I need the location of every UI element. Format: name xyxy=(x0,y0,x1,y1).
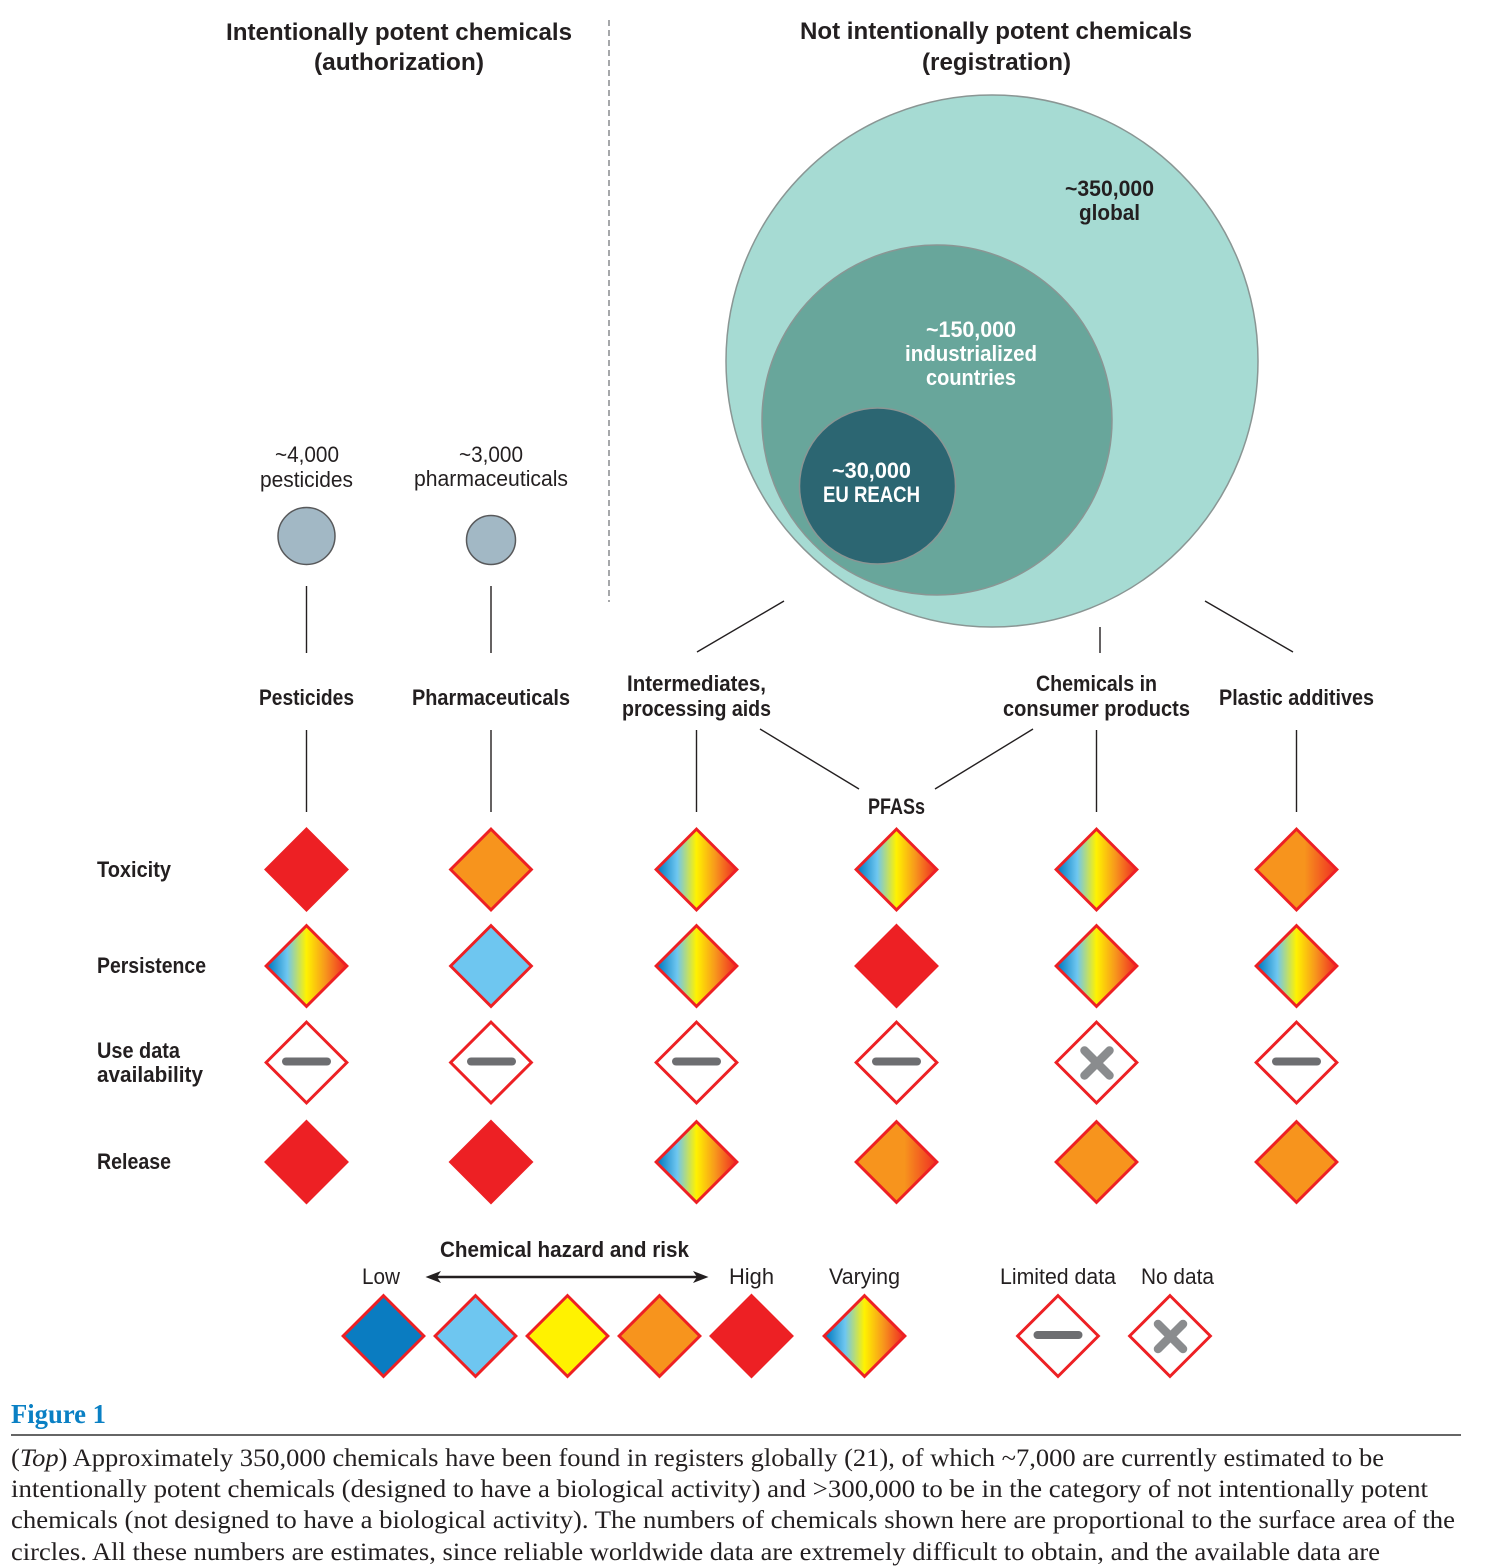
legend labels: Limited data xyxy=(1000,1264,1117,1289)
circle: industrialized countries xyxy=(762,245,1112,595)
row: persistence diamonds xyxy=(266,926,1337,1006)
category labels: consumer products xyxy=(1003,696,1190,721)
legend xyxy=(343,1237,1215,1376)
nested circles: registered chemicals xyxy=(726,95,1258,627)
row labels: availability xyxy=(97,1062,204,1087)
circle: global xyxy=(726,95,1258,627)
pharmaceuticals count and circle: ~3,000 xyxy=(459,442,523,467)
row labels: Release xyxy=(97,1149,171,1174)
row: release diamonds xyxy=(266,1122,1337,1202)
legend title: Chemical hazard and risk xyxy=(440,1237,690,1262)
legend labels: No data xyxy=(1141,1264,1215,1289)
connector lines xyxy=(306,586,1296,812)
pharmaceuticals count and circle xyxy=(414,442,568,564)
category labels: processing aids xyxy=(622,696,771,721)
pesticides count and circle xyxy=(260,442,353,564)
heading: not intentionally potent chemicals: Not intentionally potent chemicals xyxy=(800,18,1192,45)
legend arrow xyxy=(426,1271,708,1283)
row labels xyxy=(97,857,206,1174)
category labels: PFASs xyxy=(868,794,925,819)
label: industrialized countries: ~150,000 xyxy=(926,317,1016,342)
legend labels: Low xyxy=(362,1264,400,1289)
label: industrialized countries: countries xyxy=(926,365,1016,390)
heading: intentionally potent chemicals: (authorization) xyxy=(314,49,484,76)
legend labels: Varying xyxy=(829,1264,900,1289)
category labels: Intermediates, xyxy=(627,671,766,696)
category labels: Chemicals in xyxy=(1036,671,1157,696)
heading: intentionally potent chemicals: Intentionally potent chemicals xyxy=(226,19,572,46)
label: EU REACH xyxy=(823,458,920,507)
legend labels xyxy=(362,1264,1215,1289)
legend labels: High xyxy=(729,1264,774,1289)
caption xyxy=(11,1445,1455,1566)
row: toxicity diamonds xyxy=(266,829,1337,910)
category labels xyxy=(259,671,1374,819)
label: EU REACH: EU REACH xyxy=(823,482,920,507)
label: global xyxy=(1065,176,1154,225)
circle: EU REACH xyxy=(800,408,956,564)
pharmaceuticals count and circle: pharmaceuticals xyxy=(414,466,568,491)
pesticides count and circle: ~4,000 xyxy=(275,442,339,467)
caption: intentionally potent chemicals (designed to have a biological activity) and >300,000 to be in the category of not intentionally potent xyxy=(11,1476,1428,1503)
heading: not intentionally potent chemicals: (registration) xyxy=(922,49,1071,76)
heading: not intentionally potent chemicals xyxy=(800,18,1192,76)
legend diamonds xyxy=(343,1296,1210,1376)
label: industrialized countries xyxy=(905,317,1037,390)
label: global: ~350,000 xyxy=(1065,176,1154,201)
caption: chemicals (not designed to have a biological activity). The numbers of chemicals shown here are proportional to the surface area of the xyxy=(11,1507,1455,1534)
heading: intentionally potent chemicals xyxy=(226,19,572,76)
pesticides count and circle: pesticides xyxy=(260,467,353,492)
figure label: Figure 1 xyxy=(11,1399,106,1429)
category labels: Pesticides xyxy=(259,685,354,710)
caption: (Top) Approximately 350,000 chemicals have been found in registers globally (21), of which ~7,000 are currently estimated to be xyxy=(11,1445,1384,1472)
category labels: Pharmaceuticals xyxy=(412,685,570,710)
row: use data availability diamonds xyxy=(266,1022,1337,1103)
label: global: global xyxy=(1079,200,1140,225)
caption: circles. All these numbers are estimates, since reliable worldwide data are extremely difficult to obtain, and the available data are xyxy=(11,1539,1380,1566)
row labels: Use data xyxy=(97,1038,181,1063)
row labels: Persistence xyxy=(97,953,206,978)
row labels: Toxicity xyxy=(97,857,172,882)
label: EU REACH: ~30,000 xyxy=(832,458,911,483)
category labels: Plastic additives xyxy=(1219,685,1374,710)
label: industrialized countries: industrialized xyxy=(905,341,1037,366)
